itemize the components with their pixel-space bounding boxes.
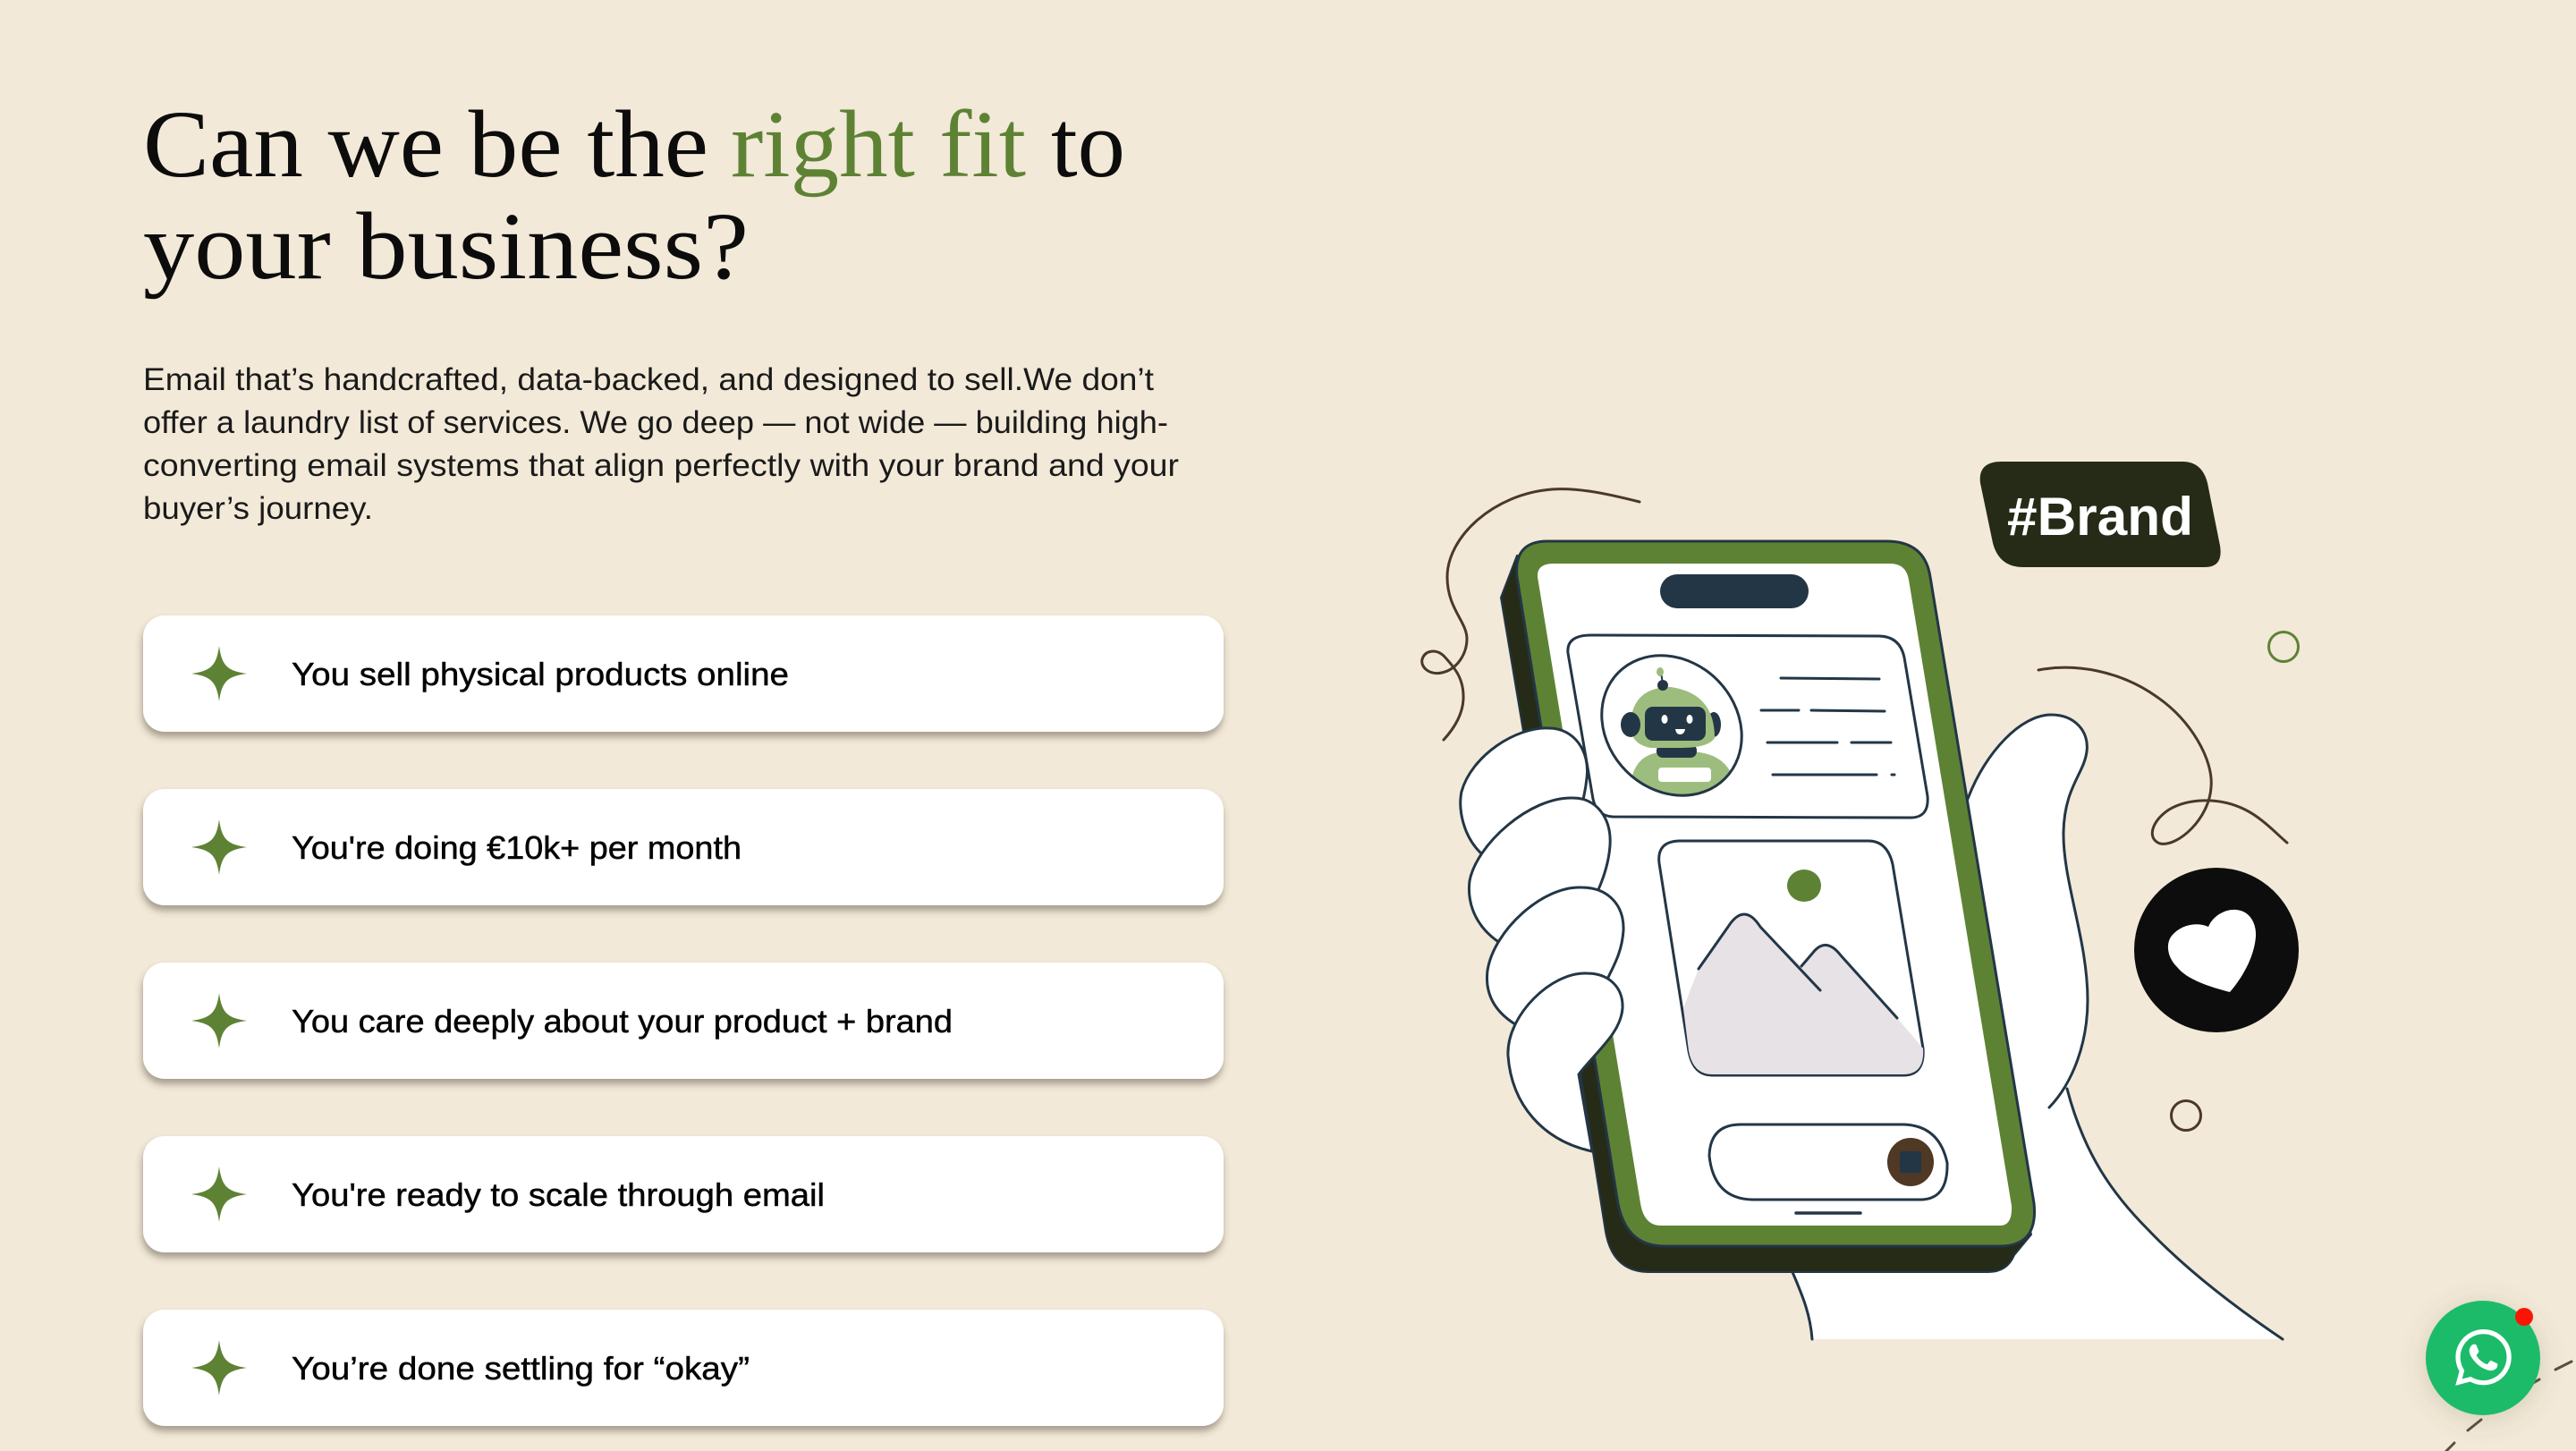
image card: [1659, 841, 1923, 1075]
title: [143, 92, 1125, 300]
card: done settling: [143, 1310, 1224, 1426]
title: right fit: [731, 92, 1026, 198]
fingers: [1461, 728, 1623, 1151]
title: Can we be the: [143, 92, 708, 198]
profile card: [1568, 627, 1928, 824]
phone green frame: [1517, 541, 2035, 1246]
hand body behind phone: [1792, 715, 2283, 1339]
input pill: [1709, 1124, 1947, 1200]
card: physical products: [143, 615, 1224, 732]
sun dot: [1787, 870, 1821, 902]
text lines: [1761, 678, 1894, 775]
decorative curl left: [1422, 489, 1640, 740]
avatar button: [1887, 1138, 1934, 1186]
intro paragraph: buyer’s journey.: [143, 491, 373, 526]
icon: sparkle: [191, 819, 247, 875]
card text: You care deeply about your product + brand: [292, 1003, 953, 1039]
icon: sparkle: [191, 1167, 247, 1222]
card: scale through email: [143, 1136, 1224, 1252]
phone notch: [1660, 574, 1809, 608]
illustration: hand holding phone: [1422, 489, 2287, 1339]
intro paragraph: Email that’s handcrafted, data-backed, and designed to sell.We don’t: [143, 362, 1154, 397]
whatsapp button: [2426, 1301, 2540, 1415]
decorative curl right: [2038, 667, 2287, 844]
icon: whatsapp: [2455, 1329, 2512, 1386]
badge: #Brand: [1980, 462, 2221, 567]
icon: heart badge: [2134, 868, 2299, 1032]
mountains: [1683, 914, 1923, 1074]
hand outlines: [1968, 715, 2088, 1107]
ring: brown: [2172, 1100, 2200, 1131]
intro paragraph: offer a laundry list of services. We go deep — not wide — building high-: [143, 405, 1168, 440]
card text: You're ready to scale through email: [292, 1176, 825, 1213]
card text: You sell physical products online: [292, 656, 789, 692]
card: product and brand: [143, 963, 1224, 1079]
icon: sparkle: [191, 1340, 247, 1396]
phone back side: [1501, 556, 2031, 1272]
intro paragraph: [143, 362, 1179, 526]
card text: You're doing €10k+ per month: [292, 829, 741, 866]
intro paragraph: converting email systems that align perfectly with your brand and your: [143, 448, 1179, 483]
home indicator: [1796, 1211, 1860, 1215]
notification dot: [2515, 1308, 2533, 1326]
icon: sparkle: [191, 993, 247, 1048]
card: revenue: [143, 789, 1224, 905]
title: to: [1051, 92, 1125, 198]
icon: sparkle: [191, 646, 247, 701]
ring: green: [2268, 632, 2299, 662]
title: your business?: [143, 194, 749, 300]
card text: You’re done settling for “okay”: [292, 1350, 750, 1387]
badge: #Brand: #Brand: [2007, 487, 2193, 547]
phone screen: [1538, 564, 2012, 1226]
robot avatar: [1600, 654, 1743, 797]
dashed line: [2446, 1362, 2572, 1451]
